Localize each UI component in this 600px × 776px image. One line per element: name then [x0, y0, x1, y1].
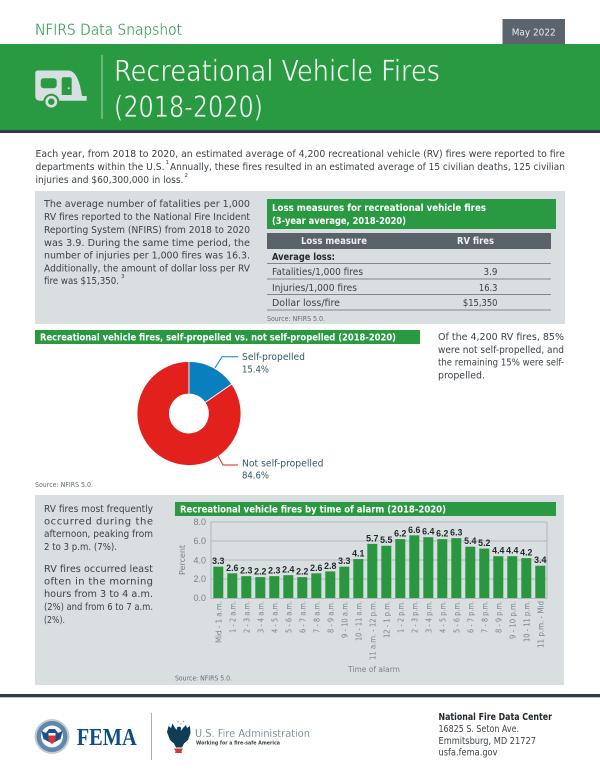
bar chart: 7 - 8 p.m. [480, 601, 489, 633]
intro paragraph: Annually, these fires resulted in an estimated average of 15 civilian deaths, 125 civilian [170, 162, 565, 173]
intro paragraph: 1 [166, 160, 169, 166]
bar chart: 3.3 [338, 556, 351, 566]
bar chart: 5.2 [478, 538, 491, 548]
footer rule [0, 694, 600, 697]
label: not self-propelled [218, 456, 324, 482]
bar chart: 7 - 8 a.m. [312, 601, 321, 633]
loss summary text [43, 199, 250, 287]
bar chart: 6 - 7 p.m. [466, 601, 475, 633]
time of alarm commentary [44, 504, 153, 626]
loss table: RV fires [457, 236, 494, 247]
bar chart: 2.3 [268, 566, 281, 576]
time of alarm commentary: RV fires occurred least [44, 564, 153, 575]
time of alarm commentary: RV fires most frequently [44, 504, 153, 515]
header band [0, 44, 600, 133]
bar chart heading: Recreational vehicle fires by time of alarm (2018-2020) [180, 504, 446, 516]
bar chart: 4.4 [492, 546, 505, 556]
logo: U.S. Fire Administration [167, 721, 310, 753]
donut chart heading: Recreational vehicle fires, self-propelled vs. not self-propelled (2018-2020) [40, 332, 396, 344]
bar chart: 8 - 9 a.m. [326, 601, 335, 633]
loss table: Average loss: [272, 252, 335, 263]
bar chart: 2.0 [193, 574, 206, 584]
donut commentary: the remaining 15% were self- [438, 358, 564, 368]
bar chart: 5.5 [380, 535, 393, 545]
time of alarm commentary: hours from 3 to 4 a.m. [44, 589, 153, 600]
logo: FEMA: FEMA [77, 724, 137, 751]
intro paragraph [36, 149, 565, 186]
label: not self-propelled: Not self-propelled [242, 459, 324, 470]
bar chart: 6.3 [450, 528, 463, 538]
loss summary text: Additionally, the amount of dollar loss per RV [44, 264, 250, 274]
label: self-propelled [215, 352, 305, 376]
table heading [267, 199, 556, 229]
bar chart: 4 - 5 a.m. [270, 601, 279, 633]
logo: U.S. Fire Administration: Working for a fire-safe America [196, 740, 280, 746]
donut chart [137, 362, 241, 466]
bar chart: 5 - 6 p.m. [452, 601, 461, 633]
loss summary text: The average number of fatalities per 1,000 [43, 199, 250, 210]
donut source: Source: NFIRS 5.0. [35, 481, 93, 489]
contact details: 16825 S. Seton Ave. [438, 724, 519, 735]
bar chart: 11 p.m. - Mid [536, 601, 545, 648]
time of alarm commentary: afternoon, peaking from [44, 529, 153, 540]
panel: loss measures [35, 191, 565, 324]
loss table: 16.3 [479, 283, 498, 294]
bar chart: 3.3 [212, 556, 225, 566]
bar chart: 6.0 [193, 536, 206, 546]
title [114, 54, 440, 124]
table source: Source: NFIRS 5.0. [267, 315, 325, 323]
bar chart: 6.6 [408, 525, 421, 535]
bar chart: 0.0 [193, 593, 206, 603]
time of alarm commentary: (2%). [44, 615, 65, 626]
bar chart: 3.4 [534, 555, 547, 565]
bar chart: 2.6 [310, 563, 323, 573]
bar chart: 5.7 [366, 533, 379, 543]
donut commentary: propelled. [438, 370, 485, 382]
bar chart: 2 - 3 a.m. [242, 601, 251, 633]
loss summary text: number of injuries per 1,000 fires was 16.3. [44, 250, 250, 262]
contact details [438, 712, 552, 759]
bar chart: 10 - 11 p.m. [522, 601, 531, 642]
loss table: Loss measure [301, 236, 367, 247]
bar chart: 4.4 [506, 546, 519, 556]
bar chart: 4.1 [352, 548, 365, 558]
loss table: Fatalities/1,000 fires [272, 267, 363, 278]
bar chart heading [175, 502, 556, 516]
bar chart: Percent [178, 545, 187, 575]
bar chart: 6.2 [436, 529, 449, 539]
loss table: Dollar loss/fire [272, 298, 340, 309]
title: Recreational Vehicle Fires [114, 54, 440, 88]
bar chart: 6 - 7 a.m. [298, 601, 307, 633]
intro paragraph: injuries and $60,300,000 in loss. [36, 175, 184, 186]
intro paragraph: 2 [184, 173, 188, 179]
panel: time of alarm [35, 495, 564, 685]
bar chart: 6.2 [394, 529, 407, 539]
loss table: Injuries/1,000 fires [272, 283, 357, 294]
bar chart: 1 - 2 p.m. [396, 601, 405, 633]
series label: NFIRS Data Snapshot [35, 20, 182, 39]
bar chart: Mid - 1 a.m. [214, 601, 223, 643]
loss summary text: was 3.9. During the same time period, the [44, 238, 250, 249]
donut commentary [438, 332, 564, 382]
bar chart: 2 - 3 p.m. [410, 601, 419, 633]
time of alarm commentary: occurred during the [44, 516, 153, 528]
table heading: (3-year average, 2018-2020) [272, 216, 406, 227]
intro paragraph: departments within the U.S. [36, 162, 164, 173]
bar chart: 8 - 9 p.m. [494, 601, 503, 633]
donut commentary: were not self-propelled, and [438, 345, 564, 356]
bar chart source: Source: NFIRS 5.0. [175, 674, 232, 682]
time of alarm commentary: (2%) and from 6 to 7 a.m. [44, 602, 153, 613]
loss table: $15,350 [463, 298, 498, 309]
bar chart: 11 a.m. - 12 p.m. [368, 601, 377, 660]
bar chart: 2.6 [226, 563, 239, 573]
bar chart: 2.8 [324, 561, 337, 571]
bar chart: 2.2 [296, 567, 309, 577]
bar chart [178, 517, 547, 674]
bar chart: 3 - 4 p.m. [424, 601, 433, 633]
bar chart: 4 - 5 p.m. [438, 601, 447, 633]
bar chart: 4.2 [520, 548, 533, 558]
date badge: May 2022 [512, 28, 556, 39]
bar chart: 2.3 [240, 566, 253, 576]
donut commentary: Of the 4,200 RV fires, 85% [438, 332, 564, 343]
label: self-propelled: Self-propelled [242, 352, 305, 363]
icon: recreational vehicle trailer [35, 70, 87, 110]
bar chart: Time of alarm [347, 665, 400, 674]
intro paragraph: Each year, from 2018 to 2020, an estimated average of 4,200 recreational vehicle (RV) fires were reported to fire [36, 149, 565, 160]
logo: FEMA [34, 719, 137, 754]
loss summary text: Reporting System (NFIRS) from 2018 to 2020 [44, 225, 250, 236]
bar chart: 1 - 2 a.m. [228, 601, 237, 633]
bar chart: 8.0 [193, 517, 206, 527]
contact details: Emmitsburg, MD 21727 [438, 736, 536, 747]
time of alarm commentary: often in the morning [44, 576, 153, 588]
label: self-propelled: 15.4% [242, 365, 269, 376]
date badge [502, 19, 565, 44]
bar chart: 5 - 6 a.m. [284, 601, 293, 633]
bar chart: 6.4 [422, 527, 435, 537]
table heading: Loss measures for recreational vehicle fires [272, 203, 486, 214]
loss summary text: RV fires reported to the National Fire Incident [44, 212, 250, 223]
logo: U.S. Fire Administration: U.S. Fire Administration [195, 727, 310, 740]
bar chart: 10 - 11 a.m. [354, 601, 363, 641]
loss table [267, 233, 551, 310]
title: (2018-2020) [114, 90, 263, 124]
bar chart: 12 - 1 p.m. [382, 601, 391, 638]
label: not self-propelled: 84.6% [242, 470, 269, 482]
divider [151, 713, 152, 760]
loss summary text: fire was $15,350. [44, 276, 119, 287]
contact details: National Fire Data Center [438, 712, 552, 723]
time of alarm commentary: 2 to 3 p.m. (7%). [44, 542, 117, 553]
bar chart: 5.4 [464, 536, 477, 546]
loss table: 3.9 [484, 267, 498, 278]
loss summary text: 3 [121, 274, 125, 280]
bar chart: 3 - 4 a.m. [256, 601, 265, 633]
bar chart: 2.2 [254, 567, 267, 577]
bar chart: 4.0 [193, 556, 206, 566]
bar chart: 9 - 10 p.m. [508, 601, 517, 639]
bar chart: 9 - 10 a.m. [340, 601, 349, 638]
bar chart: 2.4 [282, 565, 295, 575]
contact details: usfa.fema.gov [438, 748, 498, 759]
